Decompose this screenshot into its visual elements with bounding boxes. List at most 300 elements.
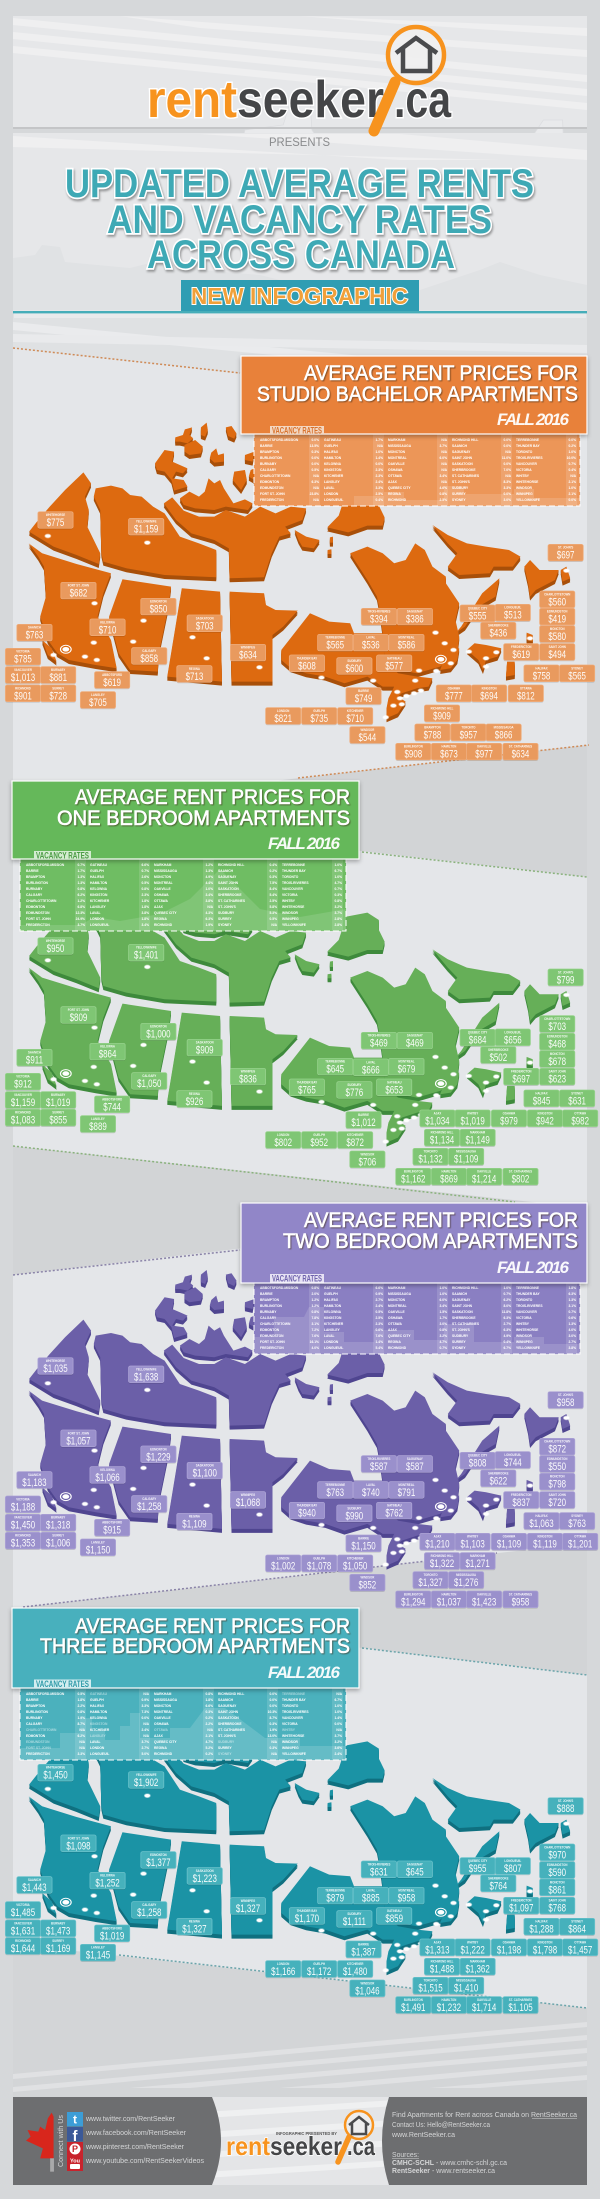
label: Kelowna: $1,252 [95, 1877, 120, 1890]
vacancy rates table: studio: 0.3% [311, 450, 319, 454]
label: St. Catharines: ST. CATHARINES [509, 1169, 533, 1174]
map: three bedroom [29, 1676, 570, 1975]
vacancy rates table: studio: 6.3% [311, 480, 319, 484]
label: Edmundston: EDMUNDSTON [547, 1863, 568, 1867]
label: Whitehorse [38, 1358, 73, 1375]
label: Edmundston: $550 [548, 1461, 566, 1473]
sources: RentSeeker [392, 2168, 430, 2175]
label: Fort St. John [61, 582, 96, 600]
vacancy rates table: studio: SAGUENAY [452, 450, 471, 454]
label: Charlottetown: $872 [548, 1443, 566, 1456]
label: Oakville [467, 1591, 502, 1609]
vacancy rates table: one bedroom: 6.3% [205, 917, 213, 921]
vacancy rates table: three bedroom: SASKATOON [218, 1716, 239, 1720]
label: Saanich: $763 [26, 629, 43, 642]
vacancy rates table: studio: 2.1% [568, 480, 576, 484]
vacancy rates table: three bedroom: BARRIE [26, 1698, 39, 1702]
label: Kingston: KINGSTON [537, 1940, 553, 1944]
label: Burnaby: BURNABY [51, 668, 66, 672]
label: St. Catharines [503, 1591, 538, 1609]
vacancy rates table: one bedroom: TORONTO [282, 875, 299, 879]
label: London: $802 [274, 1137, 292, 1149]
label: Markham: MARKHAM [470, 1554, 485, 1558]
vacancy rates table: three bedroom: 0.0% [141, 1716, 149, 1720]
label: Whitby [455, 1533, 490, 1551]
heading panel: two bedroom: TWO BEDROOM APARTMENTS [283, 1230, 578, 1253]
vacancy rates table: two bedroom: EDMUNDSTON [260, 1334, 284, 1338]
label: Montreal: $791 [398, 1487, 415, 1499]
heading panel: one bedroom: AVERAGE RENT PRICES FOR [75, 786, 350, 809]
vacancy rates table: three bedroom: LONGUEUIL [90, 1752, 109, 1756]
label: Brampton: $788 [424, 729, 441, 742]
vacancy rates table: one bedroom: 2.8% [334, 923, 342, 927]
sources: Sources: [392, 2152, 419, 2159]
label: Sydney [560, 1513, 595, 1530]
vacancy rates table: studio: KINGSTON [324, 468, 342, 472]
vacancy rates table: one bedroom: 1.8% [141, 917, 149, 921]
footer logo: INFOGRAPHIC PRESENTED BY [276, 2131, 337, 2136]
label: Toronto [413, 1148, 448, 1166]
label: London [266, 1961, 301, 1978]
label: Abbotsford: $744 [103, 1101, 122, 1114]
vacancy rates table: studio: 2.5% [439, 498, 447, 502]
label: Terrebonne [318, 634, 353, 652]
label: Kingston [527, 1110, 563, 1128]
vacancy rates table: three bedroom: WINDSOR [282, 1740, 299, 1744]
vacancy rates table: studio: N/A [441, 450, 448, 454]
label: Toronto: $1,132 [418, 1153, 443, 1166]
label: Sydney [560, 665, 595, 683]
label: Calgary: CALGARY [142, 1903, 157, 1907]
vacancy rates table: studio: VICTORIA [516, 468, 532, 472]
vacancy rates table: two bedroom: MISSISSAUGA [388, 1292, 412, 1296]
label: Gatineau: $577 [385, 660, 403, 673]
vacancy rates table: two bedroom: 3.1% [568, 1304, 576, 1308]
vacancy rates table: studio: 1.0% [568, 486, 576, 490]
logo: seeker [237, 71, 384, 129]
vacancy rates table: one bedroom: 0.2% [269, 869, 277, 873]
icon: facebook [67, 2127, 83, 2145]
label: Fort St. John [61, 1835, 96, 1853]
label: Brampton [415, 724, 450, 742]
label: Charlottetown: CHARLOTTETOWN [544, 1017, 571, 1021]
label: Whitby [455, 1939, 490, 1957]
vacancy rates table: two bedroom: GUELPH [324, 1292, 338, 1296]
label: Edmundston: EDMUNDSTON [547, 1034, 568, 1039]
vacancy rates table: studio: 0.0% [568, 438, 576, 442]
vacancy rates table: three bedroom: 0.0% [334, 1722, 342, 1726]
label: Kitchener: KITCHENER [347, 1556, 364, 1560]
vacancy rates table: one bedroom: SURREY [218, 917, 233, 921]
label: Saguenay [397, 1032, 432, 1050]
label: Calgary [132, 1073, 167, 1090]
label: Hamilton: $673 [440, 748, 458, 761]
vacancy rates table: three bedroom: 0.0% [269, 1704, 277, 1708]
vacancy rates table: studio: 0.0% [375, 462, 383, 466]
vacancy rates table: three bedroom: KITCHENER [90, 1728, 110, 1732]
label: Sudbury: $990 [346, 1510, 363, 1523]
label: Yellowknife: $1,159 [134, 523, 158, 536]
vacancy rates table: studio: N/A [313, 486, 320, 490]
label: Edmundston: EDMUNDSTON [547, 609, 568, 614]
label: Winnipeg: WINNIPEG [241, 645, 255, 650]
label: Ajax: AJAX [434, 1534, 442, 1539]
label: London: $821 [274, 713, 292, 725]
vacancy rates table: three bedroom: 0.2% [205, 1716, 213, 1720]
label: Moncton: MONCTON [550, 1880, 565, 1884]
label: Yellowknife [129, 518, 164, 536]
vacancy rates table: one bedroom: FREDERICTON [26, 923, 50, 927]
vacancy rates table: one bedroom: VICTORIA [282, 893, 298, 897]
label: Burlington: BURLINGTON [404, 1592, 423, 1596]
vacancy rates table: three bedroom: 7.3% [141, 1710, 149, 1714]
label: Yellowknife: $1,401 [134, 949, 158, 962]
vacancy rates table: three bedroom: 0.3% [269, 1722, 277, 1726]
label: Fort St. John: FORT ST. JOHN [68, 1008, 90, 1012]
vacancy rates table: three bedroom: 13.0% [268, 1734, 277, 1738]
label: Mississauga: MISSISSAUGA [456, 1573, 476, 1577]
vacancy rates table: studio: BURNABY [260, 462, 277, 466]
label: Barrie: $749 [355, 693, 372, 705]
vacancy rates table: studio: 1.0% [568, 450, 576, 454]
vacancy rates table: three bedroom: SAINT JOHN [218, 1710, 239, 1714]
label: Oshawa: $1,198 [497, 1944, 521, 1957]
label: Kingston: $942 [536, 1115, 554, 1128]
label: Fort St. John: FORT ST. JOHN [68, 583, 90, 588]
label: Langley: $889 [89, 1121, 107, 1133]
heading panel: three bedroom: AVERAGE RENT PRICES FOR [75, 1615, 350, 1638]
vacancy rates table: two bedroom: MONCTON [388, 1298, 406, 1302]
label: Langley: $705 [89, 697, 107, 709]
vacancy rates table: one bedroom: LAVAL [90, 911, 100, 915]
label: Terrebonne [318, 1058, 353, 1076]
vacancy rates table: one bedroom: KINGSTON [90, 893, 108, 897]
label: Langley: LANGLEY [91, 1117, 105, 1121]
vacancy rates table: three bedroom: N/A [336, 1692, 343, 1696]
vacancy rates table: one bedroom: KELOWNA [90, 887, 108, 891]
vacancy rates table: three bedroom: N/A [79, 1728, 86, 1732]
label: Mississauga [449, 1148, 484, 1166]
label: Winnipeg: $634 [239, 649, 257, 662]
vacancy rates table: studio: WHITBY [516, 474, 530, 478]
label: Montreal: MONTREAL [398, 1059, 415, 1064]
vacancy rates table: two bedroom: ST. JOHN'S [452, 1328, 471, 1332]
label: Kelowna: $864 [99, 1048, 117, 1061]
label: Edmundston [540, 1033, 575, 1051]
label: Saskatoon [187, 1039, 222, 1057]
logo: rent [147, 71, 237, 129]
vacancy rates table: three bedroom: RICHMOND [154, 1752, 173, 1756]
label: Saanich: SAANICH [28, 625, 41, 630]
label: Victoria: $785 [14, 653, 32, 666]
vacancy rates table: three bedroom: TROIS-RIVIERES [282, 1710, 309, 1714]
label: Abbotsford: ABBOTSFORD [102, 1097, 123, 1101]
vacancy rates table: three bedroom: 10.3% [268, 1710, 277, 1714]
vacancy rates table: three bedroom: BRAMPTON [26, 1704, 46, 1708]
label: Sherbrooke: $502 [489, 1052, 507, 1064]
label: London [266, 1132, 301, 1149]
label: Fredericton [504, 1492, 539, 1509]
label: Edmonton: EDMONTON [150, 1024, 167, 1029]
label: Quebec City: QUEBEC CITY [468, 1453, 488, 1458]
label: Regina [177, 1513, 212, 1531]
label: Oshawa: $1,109 [497, 1538, 521, 1551]
label: Halifax: $1,288 [529, 1923, 554, 1936]
social links: www.twitter.com/RentSeeker [85, 2116, 176, 2123]
vacancy rates table: three bedroom: MONCTON [154, 1704, 172, 1708]
label: Victoria [5, 1496, 41, 1514]
label: Saint John [540, 644, 575, 661]
vacancy rates table: studio: EDMONTON [260, 480, 280, 484]
vacancy rates table: studio: OTTAWA [388, 474, 402, 478]
label: Ajax: $1,034 [425, 1115, 450, 1128]
vacancy rates table: studio: SURREY [452, 492, 467, 496]
label: Ottawa: OTTAWA [574, 1111, 587, 1115]
label: Kitchener [338, 1132, 373, 1149]
vacancy rates table: three bedroom [20, 1688, 346, 1760]
label: Richmond [5, 1109, 41, 1127]
label: Terrebonne: $763 [326, 1487, 344, 1499]
vacancy rates table: two bedroom: HAMILTON [324, 1304, 342, 1308]
label: Sudbury: $600 [346, 663, 363, 675]
label: Barrie: BARRIE [358, 1942, 370, 1946]
vacancy rates table: one bedroom: CALGARY [26, 893, 43, 897]
label: Saguenay: $469 [406, 1037, 424, 1050]
vacancy rates table: three bedroom: N/A [143, 1734, 150, 1738]
label: Barrie: $1,150 [351, 1540, 376, 1553]
vacancy rates table: studio: KELOWNA [324, 462, 342, 466]
label: Halifax: $1,063 [529, 1518, 554, 1530]
label: Barrie [346, 1112, 381, 1129]
label: Fredericton: $1,097 [509, 1902, 533, 1915]
label: Windsor: WINDSOR [361, 1152, 375, 1156]
label: Saanich: SAANICH [28, 1473, 41, 1477]
label: St. Catharines: ST. CATHARINES [509, 1998, 533, 2002]
label: Longueuil: $807 [504, 1863, 522, 1875]
label: Oshawa: OSHAWA [448, 686, 461, 690]
label: Saint John [540, 1492, 575, 1509]
vacancy rates table: two bedroom: OSHAWA [388, 1316, 403, 1320]
vacancy rates table: two bedroom: BRAMPTON [260, 1298, 280, 1302]
label: Victoria: VICTORIA [16, 1497, 30, 1501]
vacancy rates table: three bedroom: 2.2% [77, 1704, 85, 1708]
label: Fredericton: $697 [512, 1073, 530, 1086]
label: Surrey [41, 1532, 76, 1550]
vacancy rates table: studio [254, 434, 580, 506]
vacancy rates table: two bedroom: 6.2% [503, 1298, 511, 1302]
label: Oshawa [436, 685, 471, 703]
label: Thunder Bay: $765 [298, 1084, 316, 1097]
label: Longueuil: LONGUEUIL [504, 1859, 522, 1863]
label: Saint John [540, 1068, 575, 1086]
label: Surrey: $728 [49, 690, 67, 703]
label: Sherbrooke: $764 [489, 1880, 508, 1893]
label: Montreal: MONTREAL [398, 1483, 415, 1487]
vacancy rates table: one bedroom: SYDNEY [218, 923, 232, 927]
vacancy rates table: one bedroom: OSHAWA [154, 893, 169, 897]
vacancy rates table: three bedroom: SURREY [218, 1746, 233, 1750]
label: Regina [177, 1918, 212, 1936]
label: Trois-Rivieres [361, 1861, 396, 1879]
label: Langley [80, 1116, 116, 1133]
vacancy rates table: studio: TORONTO [516, 450, 533, 454]
label: Moncton [540, 1473, 575, 1491]
label: Langley: $1,145 [86, 1949, 110, 1962]
label: Gatineau: GATINEAU [387, 1080, 402, 1084]
label: London: LONDON [277, 1962, 290, 1966]
contact text [391, 2112, 577, 2139]
label: Moncton [540, 1879, 575, 1897]
label: Fredericton: FREDERICTON [511, 1898, 532, 1903]
vacancy rates table: two bedroom: 0.6% [568, 1316, 576, 1320]
vacancy rates table: two bedroom: WINNIPEG [516, 1340, 533, 1344]
vacancy rates table: studio: N/A [377, 444, 384, 448]
heading panel: three bedroom: FALL 2016 [268, 1663, 341, 1682]
vacancy rates table: two bedroom: SUDBURY [452, 1334, 469, 1338]
vacancy rates table: studio: HAMILTON [324, 456, 342, 460]
vacancy rates table: two bedroom: 0.7% [568, 1310, 576, 1314]
vacancy rates table: two bedroom: YELLOWKNIFE [516, 1346, 541, 1350]
label: Saskatoon: $1,223 [193, 1873, 217, 1885]
vacancy rates table: three bedroom: SHERBROOKE [218, 1722, 242, 1726]
label: Surrey: $855 [49, 1114, 67, 1127]
label: Longueuil [495, 1452, 530, 1469]
vacancy rates table: three bedroom: 2.4% [334, 1752, 342, 1756]
label: St. John's [548, 1798, 583, 1815]
vacancy rates table: three bedroom: WINNIPEG [282, 1746, 299, 1750]
label: Richmond: RICHMOND [15, 1939, 31, 1943]
label: Saskatoon: SASKATOON [196, 616, 214, 620]
label: Surrey: SURREY [52, 1939, 65, 1943]
label: Regina: $713 [186, 671, 203, 683]
label: Burlington: $908 [404, 748, 422, 761]
label: Surrey: SURREY [52, 686, 65, 690]
vacancy rates table: two bedroom: WINDSOR [516, 1334, 533, 1338]
label: Fort St. John: $809 [70, 1012, 87, 1024]
label: Langley [80, 1539, 116, 1557]
vacancy rates table: two bedroom [254, 1282, 580, 1354]
vacancy rates table: one bedroom: 5.3% [269, 911, 277, 915]
vacancy rates table: three bedroom: BURNABY [26, 1716, 43, 1720]
label: Thunder Bay [289, 1908, 325, 1925]
sources: - www.cmhc-schl.gc.ca [436, 2160, 507, 2167]
vacancy rates table: two bedroom: SAGUENAY [452, 1298, 471, 1302]
vacancy rates table: studio: KITCHENER [324, 474, 344, 478]
vacancy rates table: three bedroom: RICHMOND HILL [218, 1692, 244, 1696]
label: Sudbury [337, 1082, 372, 1099]
vacancy rates table: two bedroom: QUEBEC CITY [388, 1334, 411, 1338]
vacancy rates table: three bedroom: KELOWNA [90, 1716, 108, 1720]
label: Moncton: MONCTON [550, 1474, 565, 1479]
label: Vancouver: VANCOUVER [14, 1921, 32, 1925]
vacancy rates table: three bedroom: 1.8% [77, 1698, 85, 1702]
vacancy rates table: two bedroom: GATINEAU [324, 1286, 342, 1290]
label: Saint John: SAINT JOHN [549, 1493, 566, 1497]
label: Markham: $1,149 [465, 1134, 490, 1147]
label: Hamilton [431, 1997, 467, 2014]
vacancy rates table: one bedroom: 6.2% [77, 893, 85, 897]
label: Richmond [5, 1532, 41, 1550]
label: Langley [80, 692, 116, 709]
label: Charlottetown: $970 [548, 1849, 566, 1862]
label: Surrey [41, 1938, 76, 1955]
vacancy rates table: two bedroom: 3.4% [439, 1304, 447, 1308]
label: Saskatoon [187, 1868, 222, 1885]
label: Vancouver [5, 667, 41, 684]
vacancy rates table: three bedroom: HAMILTON [90, 1710, 108, 1714]
label: Richmond: RICHMOND [15, 1110, 31, 1115]
label: Calgary: $1,050 [137, 1078, 161, 1090]
new infographic badge: NEW INFOGRAPHIC [191, 283, 408, 309]
vacancy rates table: two bedroom: 1.0% [439, 1292, 447, 1296]
label: Barrie: BARRIE [358, 1536, 370, 1540]
label: Burnaby: $881 [49, 672, 67, 684]
label: Toronto: TORONTO [423, 1978, 438, 1983]
label: Saint John: $768 [548, 1902, 566, 1915]
vacancy rates table: one bedroom: 24.9% [76, 917, 85, 921]
label: Terrebonne: $565 [326, 639, 344, 652]
social links: www.youtube.com/RentSeekerVideos [85, 2158, 204, 2165]
vacancy rates table: studio: BRAMPTON [260, 450, 280, 454]
label: Winnipeg: WINNIPEG [241, 1899, 255, 1903]
label: Richmond Hill: RICHMOND HILL [431, 1554, 454, 1558]
vacancy rates table: three bedroom: OAKVILLE [154, 1716, 171, 1720]
label: St. John's: ST. JOHN'S [558, 970, 574, 974]
vacancy rates table: two bedroom: 0.7% [503, 1292, 511, 1296]
label: Saskatoon: SASKATOON [196, 1040, 214, 1045]
vacancy rates table: one bedroom: 5.4% [269, 893, 277, 897]
label: Calgary: CALGARY [142, 1497, 157, 1501]
label: Regina: REGINA [189, 1092, 200, 1096]
vacancy rates table: one bedroom: 1.0% [334, 863, 342, 867]
label: Sydney: $565 [568, 670, 586, 683]
label: Burnaby [41, 1920, 76, 1938]
label: Yellowknife: YELLOWKNIFE [136, 1367, 157, 1371]
label: Kelowna: KELOWNA [100, 620, 115, 624]
label: Halifax [524, 1918, 559, 1936]
vacancy rates table: studio: N/A [441, 480, 448, 484]
vacancy rates table: three bedroom: N/A [79, 1746, 86, 1750]
label: Fort St. John [61, 1007, 96, 1024]
footer logo: rent [226, 2131, 270, 2161]
label: Ottawa [563, 1533, 598, 1551]
label: Ajax: AJAX [434, 1111, 442, 1115]
label: Langley [80, 1944, 116, 1962]
vacancy rates table: studio: 0.2% [568, 444, 576, 448]
label: Abbotsford [95, 672, 130, 689]
vacancy rates table: two bedroom: 0.5% [375, 1310, 383, 1314]
vacancy rates table: two bedroom: 6.6% [375, 1286, 383, 1290]
label: Abbotsford [95, 1519, 130, 1537]
vacancy rates table: three bedroom: 0.3% [269, 1746, 277, 1750]
label: Laval: LAVAL [366, 1060, 376, 1064]
label: Toronto [413, 1572, 448, 1589]
label: Halifax: HALIFAX [535, 1514, 548, 1518]
vacancy rates table: three bedroom: 3.7% [141, 1740, 149, 1744]
vacancy rates table: three bedroom: 0.3% [205, 1710, 213, 1714]
label: Abbotsford [95, 1925, 130, 1943]
label: Hamilton [431, 743, 467, 761]
vacancy rates table: three bedroom: YELLOWKNIFE [282, 1752, 307, 1756]
vacancy rates table: studio: 3.7% [439, 444, 447, 448]
label: Terrebonne [318, 1887, 353, 1905]
vacancy rates table: studio: WINDSOR [516, 486, 533, 490]
footer logo [226, 2111, 375, 2162]
vacancy rates table: studio: 6.0% [439, 456, 447, 460]
label: Richmond Hill: $1,488 [430, 1963, 454, 1976]
label: Longueuil: $513 [504, 609, 522, 622]
label: Ajax: $1,210 [425, 1538, 450, 1551]
